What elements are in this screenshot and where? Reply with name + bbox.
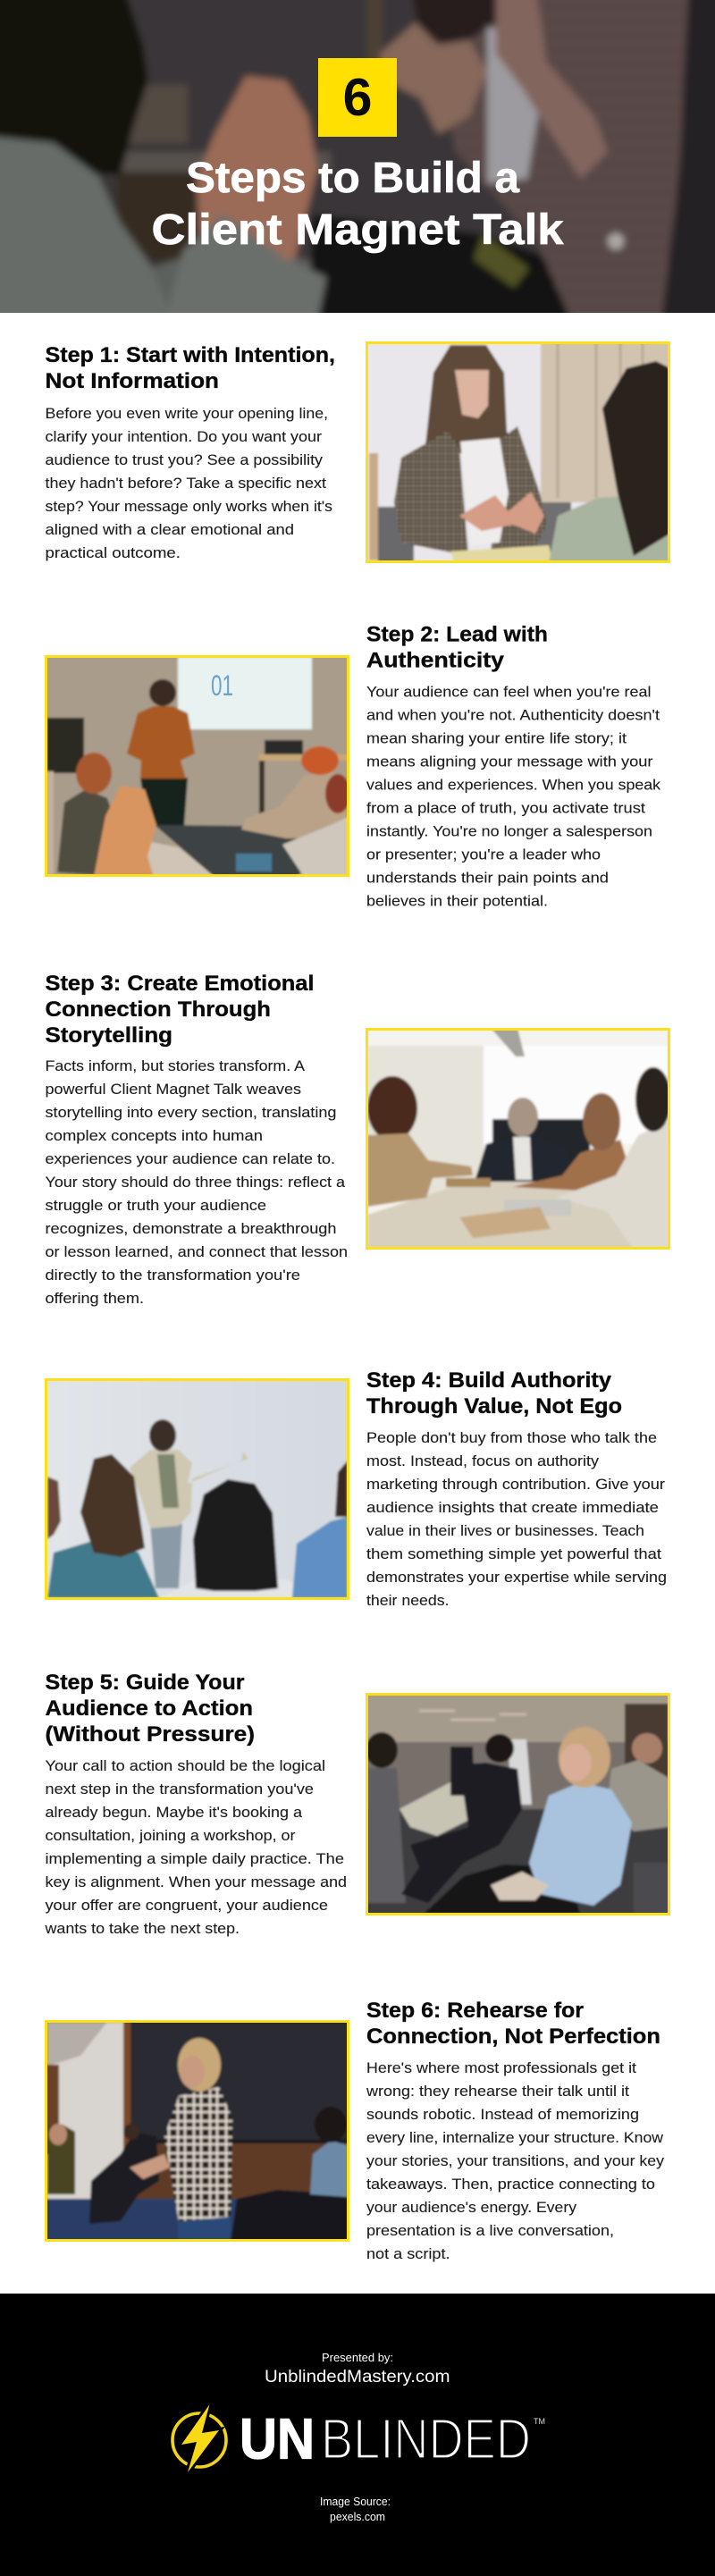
body text: step 5: Your call to action should be the logical — [45, 1758, 325, 1774]
body text: step 3: recognizes, demonstrate a breakthrough — [45, 1221, 336, 1237]
logo — [172, 2404, 545, 2472]
heading: step 2: Authenticity — [366, 649, 504, 672]
header background photo — [0, 0, 715, 313]
panel: step 5 — [44, 1671, 670, 1937]
body text: step 4: most. Instead, focus on authority — [366, 1453, 600, 1469]
body text: step 6: presentation is a live conversation, — [366, 2223, 614, 2239]
body text: step 2: values and experiences. When you speak — [366, 778, 661, 794]
body text: step 1: aligned with a clear emotional and — [45, 522, 294, 538]
body text: step 4: People don't buy from those who talk the — [366, 1430, 657, 1446]
body text: step 5: wants to take the next step. — [44, 1921, 240, 1937]
image source: Image Source: — [320, 2495, 391, 2508]
body text: step 2: or presenter; you're a leader who — [366, 847, 601, 863]
heading: step 5: Audience to Action — [45, 1696, 253, 1721]
body text: step 3: complex concepts into human — [45, 1128, 263, 1144]
photo frame — [46, 656, 349, 876]
body text: step 3: storytelling into every section, translating — [45, 1105, 336, 1121]
photo: woman in plaid blazer talking — [366, 341, 670, 563]
heading: step 1: Step 1: Start with Intention, — [45, 343, 335, 367]
body text: step 4 — [366, 1430, 667, 1609]
heading: step 3 — [45, 972, 315, 1048]
body text: step 3: Facts inform, but stories transform. A — [45, 1058, 305, 1074]
body text: step 6: your stories, your transitions, and your key — [366, 2153, 665, 2169]
body text: step 1: clarify your intention. Do you want your — [45, 429, 323, 445]
photo frame — [366, 1695, 669, 1915]
wordmark: UN: UN — [240, 2406, 315, 2471]
photo frame — [46, 2022, 349, 2240]
heading: step 4: Through Value, Not Ego — [366, 1394, 622, 1418]
heading: step 4: Step 4: Build Authority — [366, 1368, 611, 1393]
body text: step 3: or lesson learned, and connect that lesson — [45, 1244, 348, 1260]
body text: step 5: next step in the transformation you've — [45, 1781, 314, 1797]
panel: step 1 — [45, 341, 670, 563]
body text: step 6: your audience's energy. Every — [366, 2200, 577, 2216]
photo frame — [366, 1030, 669, 1248]
body text: step 1: practical outcome. — [45, 545, 181, 561]
photo: woman speaking with microphone — [45, 2020, 349, 2242]
body text: step 3: struggle or truth your audience — [45, 1198, 266, 1214]
heading: step 2: Step 2: Lead with — [366, 622, 548, 647]
body text: step 2: Your audience can feel when you're real — [366, 685, 651, 701]
body text: step 1: step? Your message only works when it's — [45, 499, 332, 515]
number badge — [318, 58, 397, 137]
panel: step 2 — [45, 622, 661, 910]
body text: step 2: means aligning your message with your — [366, 754, 653, 770]
body text: step 4: value in their lives or businesses. Teach — [366, 1523, 644, 1539]
body text: step 6: every line, internalize your structure. Know — [366, 2130, 663, 2146]
panel: step 3 — [45, 972, 671, 1307]
photo: business meeting handshake — [366, 1028, 671, 1250]
body text: step 5: key is alignment. When your message and — [45, 1874, 347, 1890]
heading: step 4 — [366, 1368, 622, 1418]
heading: step 5: (Without Pressure) — [45, 1722, 255, 1747]
heading: step 6 — [366, 1999, 660, 2049]
body text: step 2 — [366, 685, 661, 910]
body text: step 4: their needs. — [366, 1593, 449, 1609]
body text: step 5 — [44, 1758, 347, 1937]
heading: step 2 — [366, 622, 548, 672]
heading: step 1 — [45, 343, 335, 393]
wordmark: BLINDED: BLINDED — [321, 2406, 531, 2471]
body text: step 6: takeaways. Then, practice connecting to — [366, 2176, 655, 2193]
heading: step 5 — [45, 1671, 255, 1747]
trademark: TM — [534, 2417, 545, 2426]
body text: step 5: your offer are congruent, your audience — [45, 1898, 328, 1914]
body text: step 3: experiences your audience can relate to. — [45, 1151, 335, 1167]
heading: step 6: Step 6: Rehearse for — [366, 1999, 584, 2023]
body text: step 3: offering them. — [45, 1291, 144, 1307]
heading: step 3: Step 3: Create Emotional — [45, 972, 315, 996]
website: UnblindedMastery.com — [265, 2368, 450, 2387]
body text: step 5: consultation, joining a workshop, or — [45, 1828, 296, 1844]
title — [152, 155, 564, 254]
body text: step 6: not a script. — [366, 2246, 450, 2262]
body text: step 2: mean sharing your entire life story; it — [366, 731, 627, 747]
body text: step 1: audience to trust you? See a possibility — [45, 452, 324, 468]
body text: step 3: directly to the transformation you're — [45, 1267, 300, 1284]
body text: step 3: powerful Client Magnet Talk weaves — [45, 1082, 301, 1098]
body text: step 6 — [366, 2060, 665, 2262]
heading: step 6: Connection, Not Perfection — [366, 2025, 660, 2049]
projected slide number: 01 — [211, 669, 233, 702]
photo frame — [366, 343, 669, 561]
body text: step 4: audience insights that create immediate — [366, 1500, 659, 1516]
footer — [0, 2294, 715, 2576]
title: Steps to Build a — [186, 155, 519, 202]
heading: step 3: Connection Through — [45, 998, 271, 1022]
body text: step 3: Your story should do three things: reflect a — [45, 1174, 346, 1191]
heading: step 3: Storytelling — [45, 1023, 172, 1048]
body text: step 2: instantly. You're no longer a salesperson — [366, 824, 652, 840]
panel: step 6 — [45, 1999, 665, 2262]
body text: step 2: from a place of truth, you activate trust — [366, 801, 645, 817]
body text: step 1 — [45, 406, 332, 561]
body text: step 1: Before you even write your opening line, — [45, 406, 328, 422]
photo: seated audience smiling — [366, 1693, 670, 1915]
number badge: 6 — [343, 68, 372, 127]
heading: step 1: Not Information — [45, 369, 219, 393]
header banner — [0, 0, 715, 322]
presented by: Presented by: — [322, 2351, 393, 2364]
image source — [320, 2495, 391, 2523]
icon: lightning bolt in ring — [172, 2404, 226, 2472]
body text: step 1: they hadn't before? Take a specific next — [45, 476, 326, 492]
body text: step 4: demonstrates your expertise while serving — [366, 1570, 667, 1586]
title: Client Magnet Talk — [152, 206, 564, 254]
image source: pexels.com — [330, 2510, 385, 2523]
body text: step 2: believes in their potential. — [366, 894, 548, 910]
photo: speaker pointing at white wall — [45, 1378, 349, 1600]
body text: step 5: already begun. Maybe it's booking a — [45, 1805, 303, 1821]
body text: step 5: implementing a simple daily practice. The — [45, 1851, 344, 1867]
body text: step 6: wrong: they rehearse their talk until it — [366, 2084, 629, 2100]
body text: step 2: understands their pain points and — [366, 871, 609, 887]
body text: step 6: Here's where most professionals get it — [366, 2060, 636, 2076]
photo: man presenting to a meeting — [45, 655, 350, 877]
panel: step 4 — [45, 1368, 667, 1609]
heading: step 5: Step 5: Guide Your — [45, 1671, 245, 1695]
body text: step 4: them something simple yet powerful that — [366, 1546, 661, 1562]
body text: step 6: sounds robotic. Instead of memorizing — [366, 2107, 639, 2123]
body text: step 4: marketing through contribution. Give your — [366, 1477, 666, 1493]
body text: step 3 — [45, 1058, 348, 1307]
body text: step 2: and when you're not. Authenticity doesn't — [366, 708, 660, 724]
photo frame — [46, 1380, 349, 1598]
